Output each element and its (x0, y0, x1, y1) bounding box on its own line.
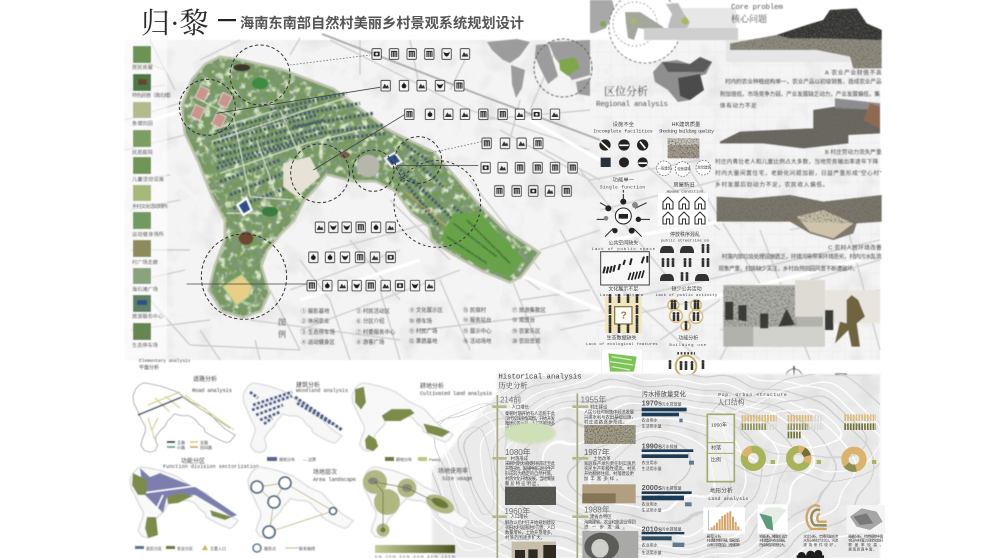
bars: 2000s: 农业用水 (642, 501, 658, 507)
timeline column one: 隋唐设置州县，人口不断增多 (505, 420, 556, 427)
lack of culture display: ? (621, 311, 627, 322)
text: problem B: 村庄内青壮老人和儿童比例占大多数，当地劳务输出率逐年下降 (715, 157, 879, 165)
heading: history (498, 373, 582, 390)
timeline column two: 家庭联产承包责任制实施后 (584, 460, 636, 467)
bars: 2010s (642, 524, 684, 555)
people bars (742, 418, 876, 435)
text: problem C: 现象严重，村民缺少关注，乡村自然田园风景不断遭破坏。 (718, 265, 858, 273)
timeline column one: 沿海地带有村落出现。 (505, 425, 552, 432)
incomplete facilities: Incomplete facilities (593, 129, 653, 135)
bars: 1970s: 污水排放量 (662, 400, 682, 406)
road analysis map: 道路分析 (193, 375, 217, 383)
bars: 2000s (642, 483, 692, 513)
analysis captions: 高程分析 (707, 533, 722, 538)
panel: wastewater bars (642, 389, 694, 555)
timeline column one: 人口增长 (511, 513, 529, 520)
lack of public space: Lack of public space (592, 247, 656, 252)
text: problem C: C 农村人居环境改善 (828, 244, 882, 252)
timeline column one: 汉代设珠崖儋耳郡，开始开发 (505, 415, 556, 422)
road analysis map: 小路 (177, 444, 185, 450)
analysis captions: 村庄建设与农业发展， (759, 538, 788, 543)
lack of activity: 缺少公共活动 (672, 286, 702, 293)
compass and scale bar (786, 366, 873, 385)
function division map: 居民分区 (146, 545, 162, 551)
timeline column two: 1987年 (584, 447, 610, 457)
building clusters (213, 93, 517, 260)
bars: 2000s: 生活用水量 (642, 507, 662, 513)
road analysis map: 田间路 (200, 444, 212, 450)
panel: terrain analysis: 地形分析 (710, 487, 733, 495)
building quality: HK建筑质量 (672, 120, 701, 128)
photo collage: villagers (723, 280, 880, 347)
node thumbnails column: 村广场走廊 (132, 258, 158, 266)
striped plots (190, 86, 232, 128)
bars: 1990s: 污水排放 (662, 443, 678, 449)
heading: history: 历史分析 (498, 381, 528, 390)
area landscape map: 场地层次 (313, 468, 337, 476)
bars: 1990s: 生活用水量 (642, 465, 662, 471)
analysis mini maps (130, 375, 492, 558)
area landscape map (248, 467, 356, 552)
timeline column one: 开垦田地，发展种植与渔业生产 (505, 465, 556, 472)
silhouettes (797, 550, 824, 558)
yellow lawn (223, 275, 252, 305)
legend: ⑰ 旅游集散区 (512, 306, 546, 314)
legend: ⑱ 观景台 (512, 316, 535, 324)
khaki frame: 村落 (711, 444, 721, 451)
text: problem B: B 村庄劳动力流失严重 (825, 148, 882, 156)
heading: population: Pop. Urban structure (718, 392, 787, 398)
legend: ③ 生态停车场 (301, 328, 335, 336)
timeline column two: 人民公社时期集体经济发展 (584, 408, 635, 415)
disorderly parking: public streetline on (661, 239, 710, 244)
lack of public space (592, 239, 656, 285)
timeline column two: 村庄建设 (590, 403, 608, 410)
analysis captions: 村庄整体地势平缓，南高北低 (707, 538, 740, 543)
legend: ⑮ 展示中心 (463, 327, 492, 335)
cultivated land map (352, 382, 492, 462)
lack of activity: Lack of public activity (656, 293, 718, 298)
analysis captions: 覆盖率较高。 (848, 542, 883, 547)
analysis captions: 西南局部坡度较大。 (759, 542, 788, 547)
node thumbnails column: 乡村文化活动场所 (132, 202, 168, 210)
heading: history: Historical analysis (498, 373, 582, 381)
legend: 例 (278, 329, 286, 339)
timeline column two (572, 393, 638, 558)
node thumbnails column: 鱼塘田园 (132, 119, 153, 127)
topographic contour background (432, 374, 880, 558)
timeline column one: 村落形成 (511, 455, 529, 462)
panel: terrain analysis: Land analysis (708, 496, 748, 502)
timeline column one: 1960年 (504, 506, 530, 516)
disorderly parking: 停放秩序混乱 (670, 231, 700, 238)
site usage map: Site usage (442, 475, 472, 482)
text: problem B: 乡村发展后劲动力不足，农民收入偏低。 (715, 181, 828, 189)
text: problem B: 村内大量闲置住宅，老龄化问题加剧，日益严重形成"空心村" (715, 169, 882, 177)
area landscape map: Area landscape (313, 476, 356, 483)
node thumbnails column: 居民房屋 (132, 63, 153, 71)
text: problem A (720, 69, 882, 109)
node thumbnails column: 海石滩广场 (132, 285, 158, 293)
node thumbnails column: 生态停车场 (132, 341, 158, 349)
cultivated land map: Paddy (429, 457, 440, 462)
bars: 2000s: 污水排放量 (662, 484, 682, 490)
building use (668, 334, 707, 376)
function division map: Function division sectorization (163, 464, 259, 470)
timeline column two: 建省办特区 (590, 513, 612, 520)
node thumbnails column: 运动健身场所 (132, 230, 164, 238)
building use: 功能分析 (678, 334, 698, 341)
legend: ① 摄影基地 (301, 307, 330, 315)
legend: ⑪ 村民广场 (409, 327, 438, 335)
bars: 1970s: 农业用水 (642, 417, 658, 423)
cultivated land map: Cultivated land analysis (420, 390, 492, 397)
heading: core problem: 核心问题 (731, 13, 767, 24)
legend: ⑬ 民宿村 (463, 306, 487, 314)
road analysis map (133, 375, 235, 452)
panel: problem diagrams column: House condition (667, 190, 704, 195)
bars: 2010s: 污水排放量 (662, 526, 682, 532)
donut charts (744, 449, 863, 468)
single function (600, 176, 645, 190)
road analysis map: 主路 (177, 439, 185, 445)
timeline column one: 数量增长，土地开垦增多， (505, 529, 555, 536)
timeline column one: 聚居特征明显。 (505, 480, 542, 487)
lack of public space: 公共空间缺失 (608, 239, 638, 246)
lack of ecology (586, 334, 658, 376)
legend: Elementary analysis (139, 358, 191, 364)
analysis captions: 农田与村落之间绿化较好 (848, 538, 884, 543)
single function: Single function (600, 185, 645, 190)
legend: ⑫ 果蔬基地 (409, 337, 438, 345)
lack of ecology: Lack of ecological features (586, 342, 658, 347)
timeline column one: 宋朝时期大规模移民南迁至此 (505, 460, 556, 467)
road analysis map: 支路 (200, 439, 208, 445)
slope fan chart (758, 504, 788, 533)
area landscape map: 服务点 (264, 545, 276, 551)
node thumbnails column: 旅游服务中心 (132, 312, 163, 320)
white village streets (200, 97, 447, 227)
function division map: 功能分区 (181, 457, 205, 465)
timeline column one: 214前 (500, 395, 521, 405)
function division map: 农业分区 (177, 545, 193, 551)
text: problem C: 村落内部垃圾处理设施匮乏，环境污染带来环境恶劣，村内污水乱流 (722, 253, 882, 261)
house icon grid (658, 193, 708, 226)
single function: 功能单一 (613, 176, 635, 184)
timeline column one: 人口增长 (512, 403, 530, 410)
site usage map: 场地使用率 (438, 467, 468, 475)
timeline column one: 1080年 (505, 447, 531, 457)
text: problem B (715, 148, 882, 189)
analysis captions: 景观资源丰富。 (848, 546, 877, 551)
gray terrain map (847, 505, 885, 533)
building quality: 危险建筑 (697, 165, 711, 170)
legend: ⑯ 活动场地 (463, 337, 492, 345)
timeline column two: 海南建省，农业和旅游业得到 (584, 518, 636, 525)
building analysis map: 建筑分布 (279, 456, 295, 462)
lack of activity (656, 286, 718, 331)
location analysis: world map, Hainan and China (487, 0, 736, 109)
khaki frame: 比例 (711, 457, 721, 464)
heading: core problem (731, 4, 783, 24)
bars: 1970s: 1970s (642, 399, 662, 408)
photo: excavated land (717, 195, 882, 240)
legend: ⑤ 村民活动区 (356, 307, 390, 315)
node thumbnails column: 特色民宿（南北楼） (132, 91, 174, 99)
legend: ⑳ 农田景观 (512, 337, 541, 345)
timeline column one (492, 395, 556, 558)
khaki frame (707, 414, 734, 482)
building quality: 较差建筑 (677, 166, 691, 171)
panel: terrain analysis (703, 487, 885, 558)
road analysis map: Road analysis (192, 387, 232, 394)
lack of culture display (600, 286, 644, 333)
heading: population: 人口结构 (718, 397, 745, 406)
bars: 2010s: 2010s (642, 524, 662, 533)
background: aerial base map (125, 34, 880, 360)
analysis captions: 水文分析，年降雨量充沛 (803, 533, 839, 538)
radial function diagram (597, 190, 650, 237)
node thumbnails column: 民居庭院 (132, 148, 154, 156)
panel: historical analysis (492, 373, 638, 558)
arc chart (807, 505, 827, 529)
bars: 1990s (642, 441, 694, 471)
incomplete facilities: 设施不全 (613, 120, 635, 128)
timeline column two: 加丰富多样。 (584, 475, 621, 482)
timeline column one: 村落范围逐步扩大。 (505, 534, 545, 541)
text: problem C (718, 244, 882, 273)
text: problem A: A 农业产业财值不高 (825, 69, 882, 77)
site usage map (363, 467, 472, 558)
legend: ⑲ 农家乐区 (512, 327, 541, 335)
timeline column two: 1988年 (584, 505, 610, 515)
text: problem A: 附加值低，市场竞争力弱，产业发展缺乏动力，产业发展偏低，集 (720, 90, 880, 98)
central plaza (283, 157, 320, 197)
legend: ⑧ 游客广场 (356, 338, 385, 346)
cultivated land map: 耕地分析 (420, 382, 444, 390)
legend: ⑭ 服务站台 (463, 316, 491, 324)
timeline column one: 形成较为稳定的自然村落， (505, 470, 555, 477)
top pavilion (233, 64, 250, 71)
node thumbnails column (125, 40, 174, 360)
site plan map (183, 58, 538, 316)
function division map: 主要入口 (210, 545, 226, 551)
panel: problem diagrams column (593, 120, 714, 195)
bars: 1990s: 1990s (642, 441, 662, 450)
legend (139, 306, 546, 371)
legend: 图 (278, 318, 286, 327)
khaki frame: 1950年 (711, 422, 727, 429)
legend: ④ 运动健身区 (301, 338, 335, 346)
timeline column one: 解放以后村庄开始规划建设 (505, 519, 556, 526)
photo: eroded coast ruin (730, 8, 882, 68)
timeline column two: 1955年 (581, 395, 606, 405)
disorderly parking (660, 231, 710, 281)
timeline column two: 土地改革 (593, 455, 611, 462)
photo: damaged shore (720, 98, 880, 148)
timeline column one: 村落文化开始发展，当地黎族 (505, 475, 556, 482)
dashed zone circles and leader lines (179, 45, 482, 319)
lack of culture display: 文化展示不足 (608, 286, 638, 293)
panel: core problem (644, 4, 882, 347)
timeline column one: 农田水利设施逐步完善，人口 (505, 524, 555, 531)
location analysis: world map, Hainan and China: 区位分析 (604, 84, 648, 98)
timeline column two: 兴建水利与农田基础设施， (584, 413, 636, 420)
legend: ⑩ 停车场 (409, 317, 433, 325)
node thumbnails column: 儿童活动设施 (132, 175, 164, 183)
blue buildings (385, 153, 402, 167)
legend: ⑥ 分区介绍 (356, 317, 384, 325)
title: 归·黎 (141, 7, 209, 40)
bars: 1970s: 生活用水量 (642, 422, 662, 428)
cultivated land map: 耕地分布 (396, 456, 412, 462)
timeline column two: 开始翻修住房，村落建设更 (584, 470, 635, 477)
bars: 1990s: 农业用水 (642, 459, 658, 465)
title (141, 7, 524, 40)
analysis captions (707, 533, 884, 551)
building quality: Shocking building quality (659, 129, 714, 135)
analysis captions: 坡度分析，坡度较小适合 (759, 533, 788, 538)
analysis captions: 灌溉条件较好。 (803, 542, 838, 547)
area landscape map: 联系轴线 (299, 545, 315, 551)
timeline column two: 农民生产积极性提高，村民 (584, 465, 636, 472)
text: problem A: 村内的农业种植结构单一，农业产品以初级销售，造成农业产品 (725, 77, 882, 85)
panel: population structure (707, 392, 876, 482)
analysis captions: 水系分布较为均匀，河流 (803, 538, 839, 543)
legend: ② 休闲农业 (301, 317, 330, 325)
legend: ⑨ 文化展示区 (409, 306, 443, 314)
analysis captions: 山地与平原结合，适宜耕种 (707, 542, 740, 547)
lack of ecology: 生态数据缺失 (607, 334, 637, 341)
bars: 2010s: 农业用水 (642, 542, 658, 548)
building analysis map (243, 381, 348, 462)
panel: problem diagrams column: 房屋新旧 (673, 181, 695, 189)
bars: 2010s: 生活用水量 (642, 549, 662, 555)
building analysis map: Woodland analysis (296, 388, 348, 394)
legend: 平面分析 (139, 364, 159, 371)
heading: core problem: Core problem (731, 4, 783, 12)
bars: 1970s (642, 399, 687, 428)
timeline column two: 村庄道路逐步形成。 (584, 418, 627, 425)
function division map (130, 457, 259, 551)
bars: 2000s: 2000s (642, 483, 662, 492)
lack of culture display: Lack of culture (600, 293, 644, 298)
text: problem A: 体有动力不足 (720, 101, 757, 109)
building quality: 一般建筑 (658, 165, 672, 170)
title: 海南东南部自然村美丽乡村景观系统规划设计 (240, 15, 524, 32)
building analysis map: 建筑分析 (296, 381, 320, 389)
location analysis: world map, Hainan and China: Regional analysis (596, 101, 668, 109)
panel: wastewater bars: 污水排放量变化 (642, 389, 687, 398)
building use: Building use (669, 343, 707, 348)
incomplete facilities (593, 120, 653, 167)
legend: ⑦ 村委服务中心 (356, 328, 396, 336)
analysis captions: 植被分析，热带植物丰富 (848, 533, 884, 538)
facility icon rows (307, 49, 577, 291)
building analysis map: --- 边界 (303, 456, 316, 462)
heading: population (718, 392, 787, 406)
building quality (657, 120, 714, 176)
paddy field (440, 213, 523, 277)
timeline column one: 秦朝时期开始有人迁居于此 (505, 410, 556, 417)
histogram chart (703, 507, 745, 533)
timeline column two: 进一步发展。 (584, 523, 627, 530)
